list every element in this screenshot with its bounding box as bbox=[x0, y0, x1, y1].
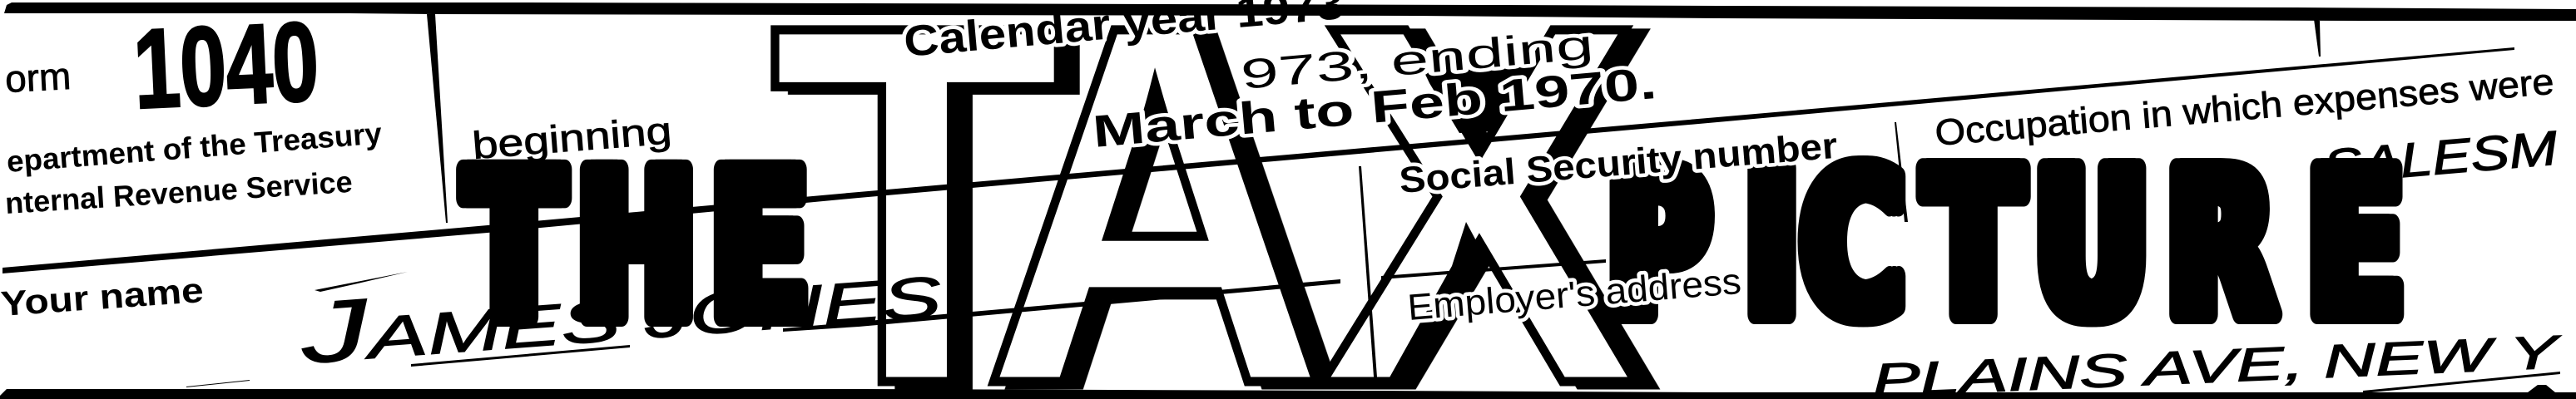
form text: social security number: Social Security number bbox=[1398, 126, 1839, 201]
form text: department of the treasury: epartment of the Treasury bbox=[5, 116, 383, 179]
form text: March to Feb: March to Feb 1970. bbox=[1091, 58, 1658, 157]
form text: your name: Your name bbox=[0, 270, 205, 323]
form text: internal revenue service: nternal Revenue Service bbox=[4, 165, 354, 220]
form text: employer address: Employer's address bbox=[1406, 261, 1743, 328]
form text: form label: orm bbox=[4, 54, 72, 101]
form text: ending date: 973, ending bbox=[1239, 21, 1595, 98]
bottom border bar bbox=[0, 389, 2576, 399]
title word: PICTURE: PICTURE bbox=[1608, 128, 2403, 362]
form text: your name handwriting: J AMES JONES bbox=[297, 239, 944, 382]
X letter heavy shading bbox=[1385, 36, 1534, 385]
form text: beginning: beginning bbox=[471, 108, 673, 167]
top border bar bbox=[4, 2, 2576, 21]
title word: THE: THE bbox=[467, 131, 807, 365]
form text: salesman handwriting: SALESM bbox=[2321, 121, 2560, 195]
form text: occupation: Occupation in which expenses were bbox=[1934, 62, 2555, 154]
